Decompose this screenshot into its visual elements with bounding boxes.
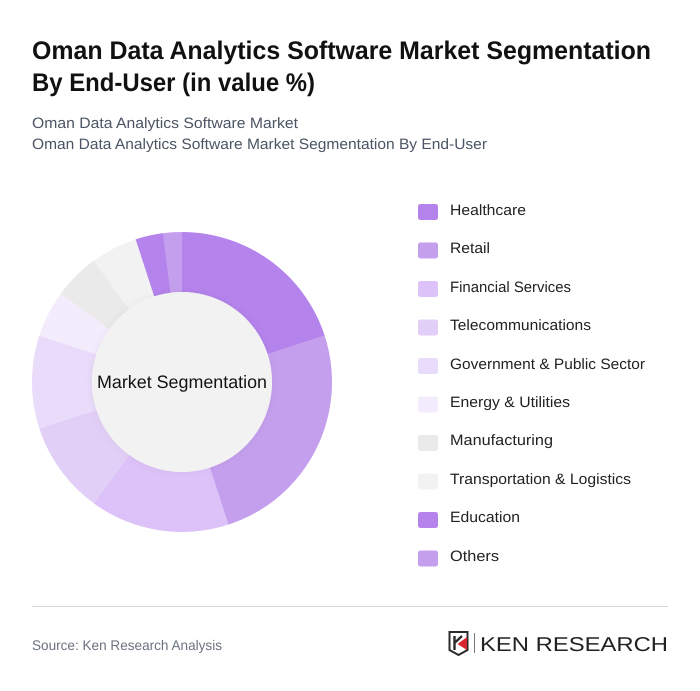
legend item: Manufacturing	[418, 432, 553, 451]
legend item: Financial Services: Financial Services	[450, 279, 571, 296]
donut chart	[32, 232, 332, 532]
logo: Ken Research: KEN RESEARCH	[480, 634, 668, 656]
legend item: Energy & Utilities	[418, 394, 570, 412]
legend	[418, 202, 645, 566]
donut centre: Market Segmentation	[97, 372, 267, 392]
title: Oman Data Analytics Software Market Segmentation	[32, 37, 651, 65]
segment: Energy & Utilities	[39, 294, 109, 354]
segment: Financial Services	[94, 455, 228, 532]
segment: Others	[163, 232, 182, 293]
legend item: Healthcare	[418, 202, 526, 220]
donut centre	[92, 292, 272, 472]
segment: Government & Public Sector	[32, 336, 96, 428]
icon: logo shield	[450, 632, 468, 655]
segment: Healthcare	[182, 232, 325, 354]
segment: Manufacturing	[61, 261, 129, 329]
legend item: Government & Public Sector: Government & Public Sector	[450, 356, 645, 373]
legend item: Energy & Utilities: Energy & Utilities	[450, 394, 570, 411]
legend item: Retail: Retail	[450, 240, 490, 257]
legend item: Education: Education	[450, 509, 520, 526]
source note: Source: Ken Research Analysis	[32, 637, 222, 653]
legend item: Others	[418, 548, 499, 566]
legend item: Retail	[418, 240, 490, 258]
logo: Ken Research	[450, 632, 668, 656]
title	[32, 37, 651, 97]
legend item: Manufacturing: Manufacturing	[450, 432, 553, 449]
legend item: Healthcare: Healthcare	[450, 202, 526, 219]
legend item: Others: Others	[450, 548, 499, 565]
subtitle	[32, 115, 487, 153]
segment: Telecommunications	[39, 410, 129, 503]
legend item: Transportation & Logistics: Transportation & Logistics	[450, 471, 631, 488]
legend item: Telecommunications: Telecommunications	[450, 317, 591, 334]
segment: Transportation & Logistics	[94, 239, 154, 309]
subtitle: Oman Data Analytics Software Market Segmentation By End-User	[32, 136, 487, 153]
segment: Education	[136, 233, 171, 296]
segment: Retail	[210, 336, 332, 525]
title: By End-User (in value %)	[32, 69, 315, 97]
legend item: Education	[418, 509, 520, 528]
subtitle: Oman Data Analytics Software Market	[32, 115, 299, 132]
